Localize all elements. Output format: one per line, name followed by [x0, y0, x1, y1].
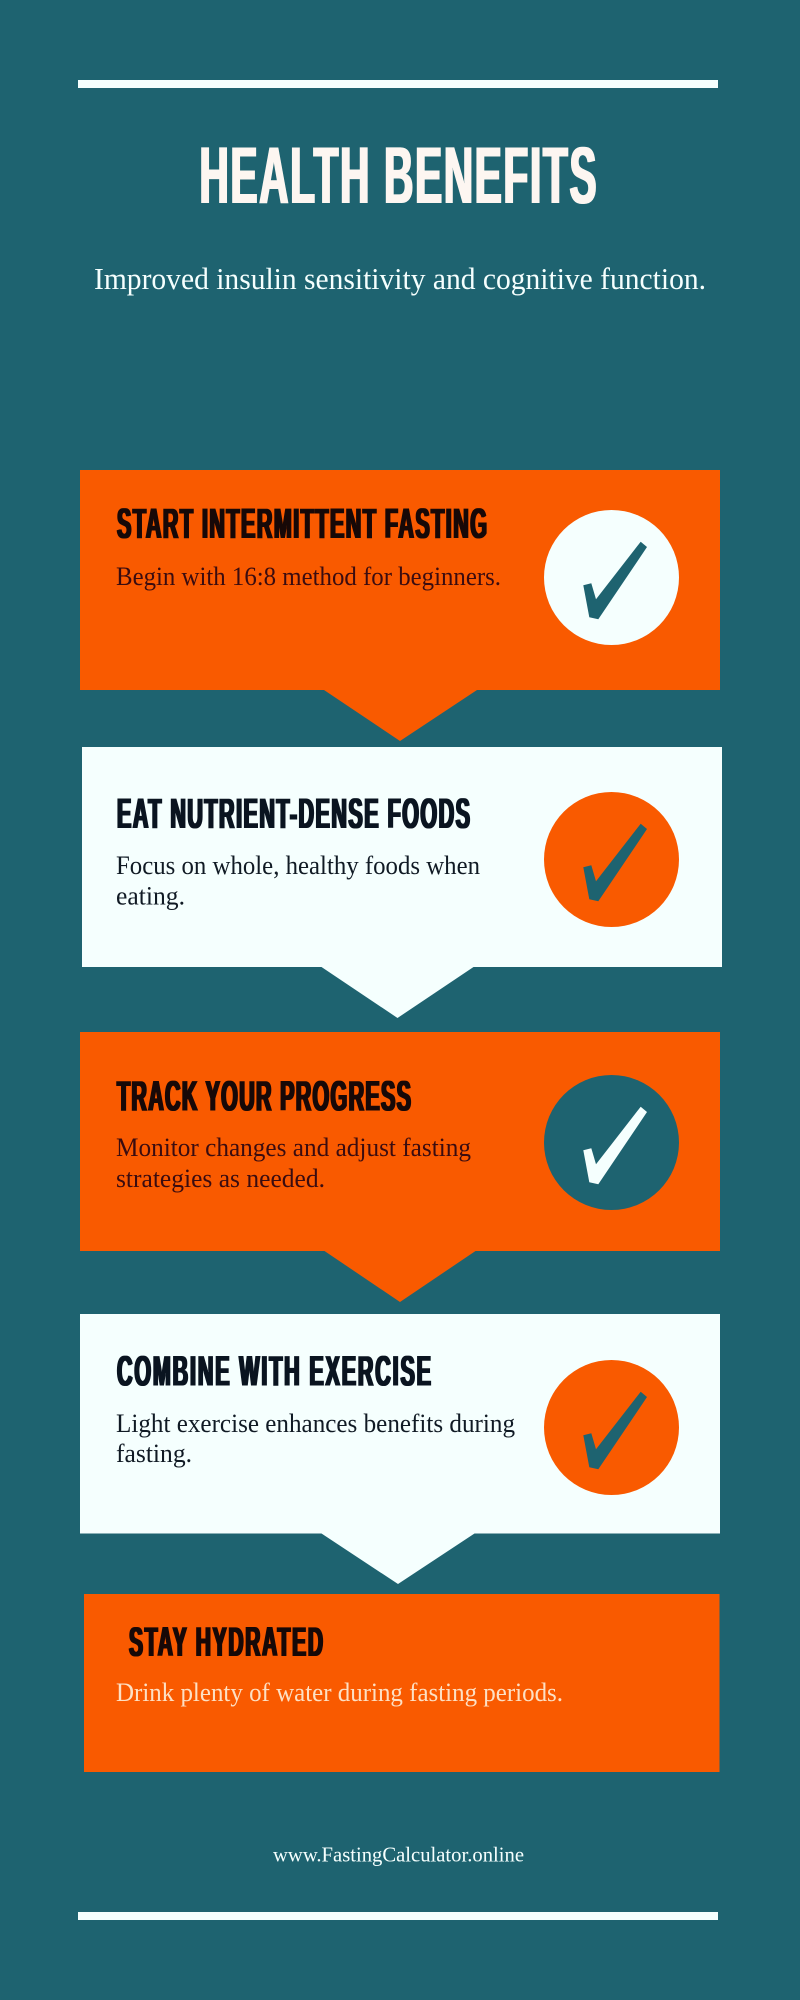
panel: stay hydrated — [84, 1594, 720, 1772]
icon: check in white circle — [544, 510, 679, 645]
description: Drink plenty of water during fasting periods. — [116, 1678, 563, 1707]
description: Light exercise enhances benefits during — [116, 1409, 515, 1438]
description: eating. — [116, 882, 185, 910]
panel background with arrow — [80, 1314, 720, 1584]
description: Begin with 16:8 method for beginners. — [116, 562, 501, 591]
heading: EAT NUTRIENT-DENSE FOODS — [117, 790, 470, 838]
title: HEALTH BENEFITS — [200, 130, 596, 221]
description — [116, 1409, 515, 1468]
panel background — [84, 1594, 720, 1772]
description — [116, 851, 480, 910]
icon: check in orange circle — [544, 792, 679, 927]
bottom bar — [78, 1912, 718, 1920]
footer url: www.FastingCalculator.online — [273, 1842, 524, 1866]
panel: track your progress — [80, 1032, 720, 1302]
icon: check in orange circle — [544, 1360, 679, 1495]
panel background with arrow — [80, 470, 720, 741]
description: Monitor changes and adjust fasting — [116, 1133, 471, 1162]
heading: START INTERMITTENT FASTING — [117, 500, 487, 548]
panel: combine with exercise — [80, 1314, 720, 1584]
heading: COMBINE WITH EXERCISE — [117, 1348, 431, 1396]
panel: start intermittent fasting — [80, 470, 720, 741]
panel background with arrow — [82, 747, 722, 1018]
description: Focus on whole, healthy foods when — [116, 851, 480, 880]
top bar — [78, 80, 718, 88]
description: fasting. — [116, 1439, 192, 1468]
heading: TRACK YOUR PROGRESS — [117, 1073, 411, 1121]
heading: STAY HYDRATED — [129, 1619, 323, 1666]
description — [116, 1133, 471, 1193]
panel background with arrow — [80, 1032, 720, 1302]
description: strategies as needed. — [116, 1164, 325, 1193]
subtitle: Improved insulin sensitivity and cognitive function. — [94, 261, 706, 296]
icon: check in teal circle — [544, 1075, 679, 1210]
panel: eat nutrient-dense foods — [82, 747, 722, 1018]
